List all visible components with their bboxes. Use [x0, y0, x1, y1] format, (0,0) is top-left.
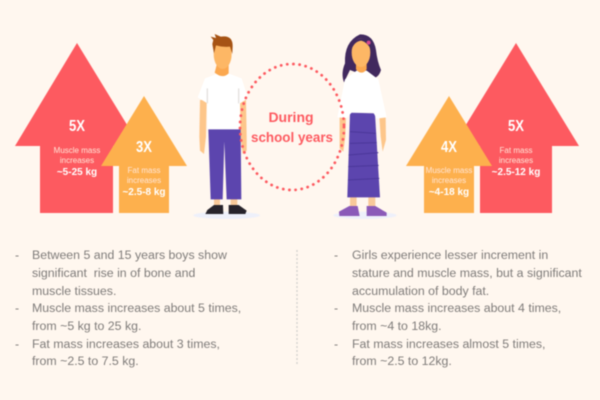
left red arrow: boys muscle mass: 5X: [69, 118, 86, 135]
text block: boys: from ~5 kg to 25 kg.: [32, 319, 141, 333]
left red arrow: boys muscle mass: Muscle mass: [54, 146, 100, 155]
right red arrow: girls fat mass: 5X: [508, 118, 525, 135]
heading: during school years: During: [268, 109, 314, 125]
text block: girls: Muscle mass increases about 4 times,: [352, 301, 561, 315]
text block: boys: muscle tissues.: [32, 284, 116, 298]
text block: boys: [15, 248, 241, 368]
text block: boys: -: [15, 337, 19, 351]
left orange arrow: boys fat mass: Fat mass: [128, 166, 160, 175]
text block: girls: -: [334, 248, 338, 262]
text block: boys: from ~2.5 to 7.5 kg.: [32, 354, 139, 368]
left red arrow: boys muscle mass: increases: [60, 156, 94, 165]
figure: girl: [333, 34, 397, 219]
text block: boys: Fat mass increases about 3 times,: [32, 337, 220, 351]
text block: girls: Fat mass increases almost 5 times,: [352, 337, 545, 351]
text block: girls: [334, 248, 582, 368]
right red arrow: girls fat mass: increases: [499, 156, 533, 165]
text block: girls: from ~4 to 18kg.: [352, 319, 442, 333]
right orange arrow: girls muscle mass: increases: [432, 176, 466, 185]
dotted circle: [240, 64, 344, 190]
right orange arrow: girls muscle mass: ~4-18 kg: [429, 187, 469, 198]
text block: girls: from ~2.5 to 12kg.: [352, 354, 452, 368]
left red arrow: boys muscle mass: [15, 43, 140, 213]
text block: boys: significant rise in of bone and: [32, 266, 195, 280]
text block: girls: accumulation of body fat.: [352, 284, 489, 298]
left red arrow: boys muscle mass: ~5-25 kg: [57, 167, 97, 178]
text block: girls: Girls experience lesser increment in: [352, 248, 548, 262]
text block: boys: -: [15, 248, 19, 262]
text block: girls: -: [334, 337, 338, 351]
right orange arrow: girls muscle mass: Muscle mass: [426, 166, 472, 175]
right red arrow: girls fat mass: ~2.5-12 kg: [492, 167, 540, 178]
text block: boys: Between 5 and 15 years boys show: [32, 248, 227, 262]
right red arrow: girls fat mass: Fat mass: [500, 146, 532, 155]
text block: boys: -: [15, 301, 19, 315]
right red arrow: girls fat mass: [453, 43, 579, 213]
text block: boys: Muscle mass increases about 5 times,: [32, 301, 241, 315]
left orange arrow: boys fat mass: [101, 96, 187, 213]
left orange arrow: boys fat mass: increases: [127, 176, 161, 185]
right orange arrow: girls muscle mass: [406, 96, 492, 213]
left orange arrow: boys fat mass: ~2.5-8 kg: [122, 187, 166, 198]
right orange arrow: girls muscle mass: 4X: [441, 139, 458, 156]
text block: girls: stature and muscle mass, but a significant: [352, 266, 582, 280]
left orange arrow: boys fat mass: 3X: [136, 139, 153, 156]
figure: boy: [193, 34, 260, 219]
text block: girls: -: [334, 301, 338, 315]
heading: during school years: school years: [251, 129, 333, 145]
heading: during school years: [251, 109, 333, 145]
